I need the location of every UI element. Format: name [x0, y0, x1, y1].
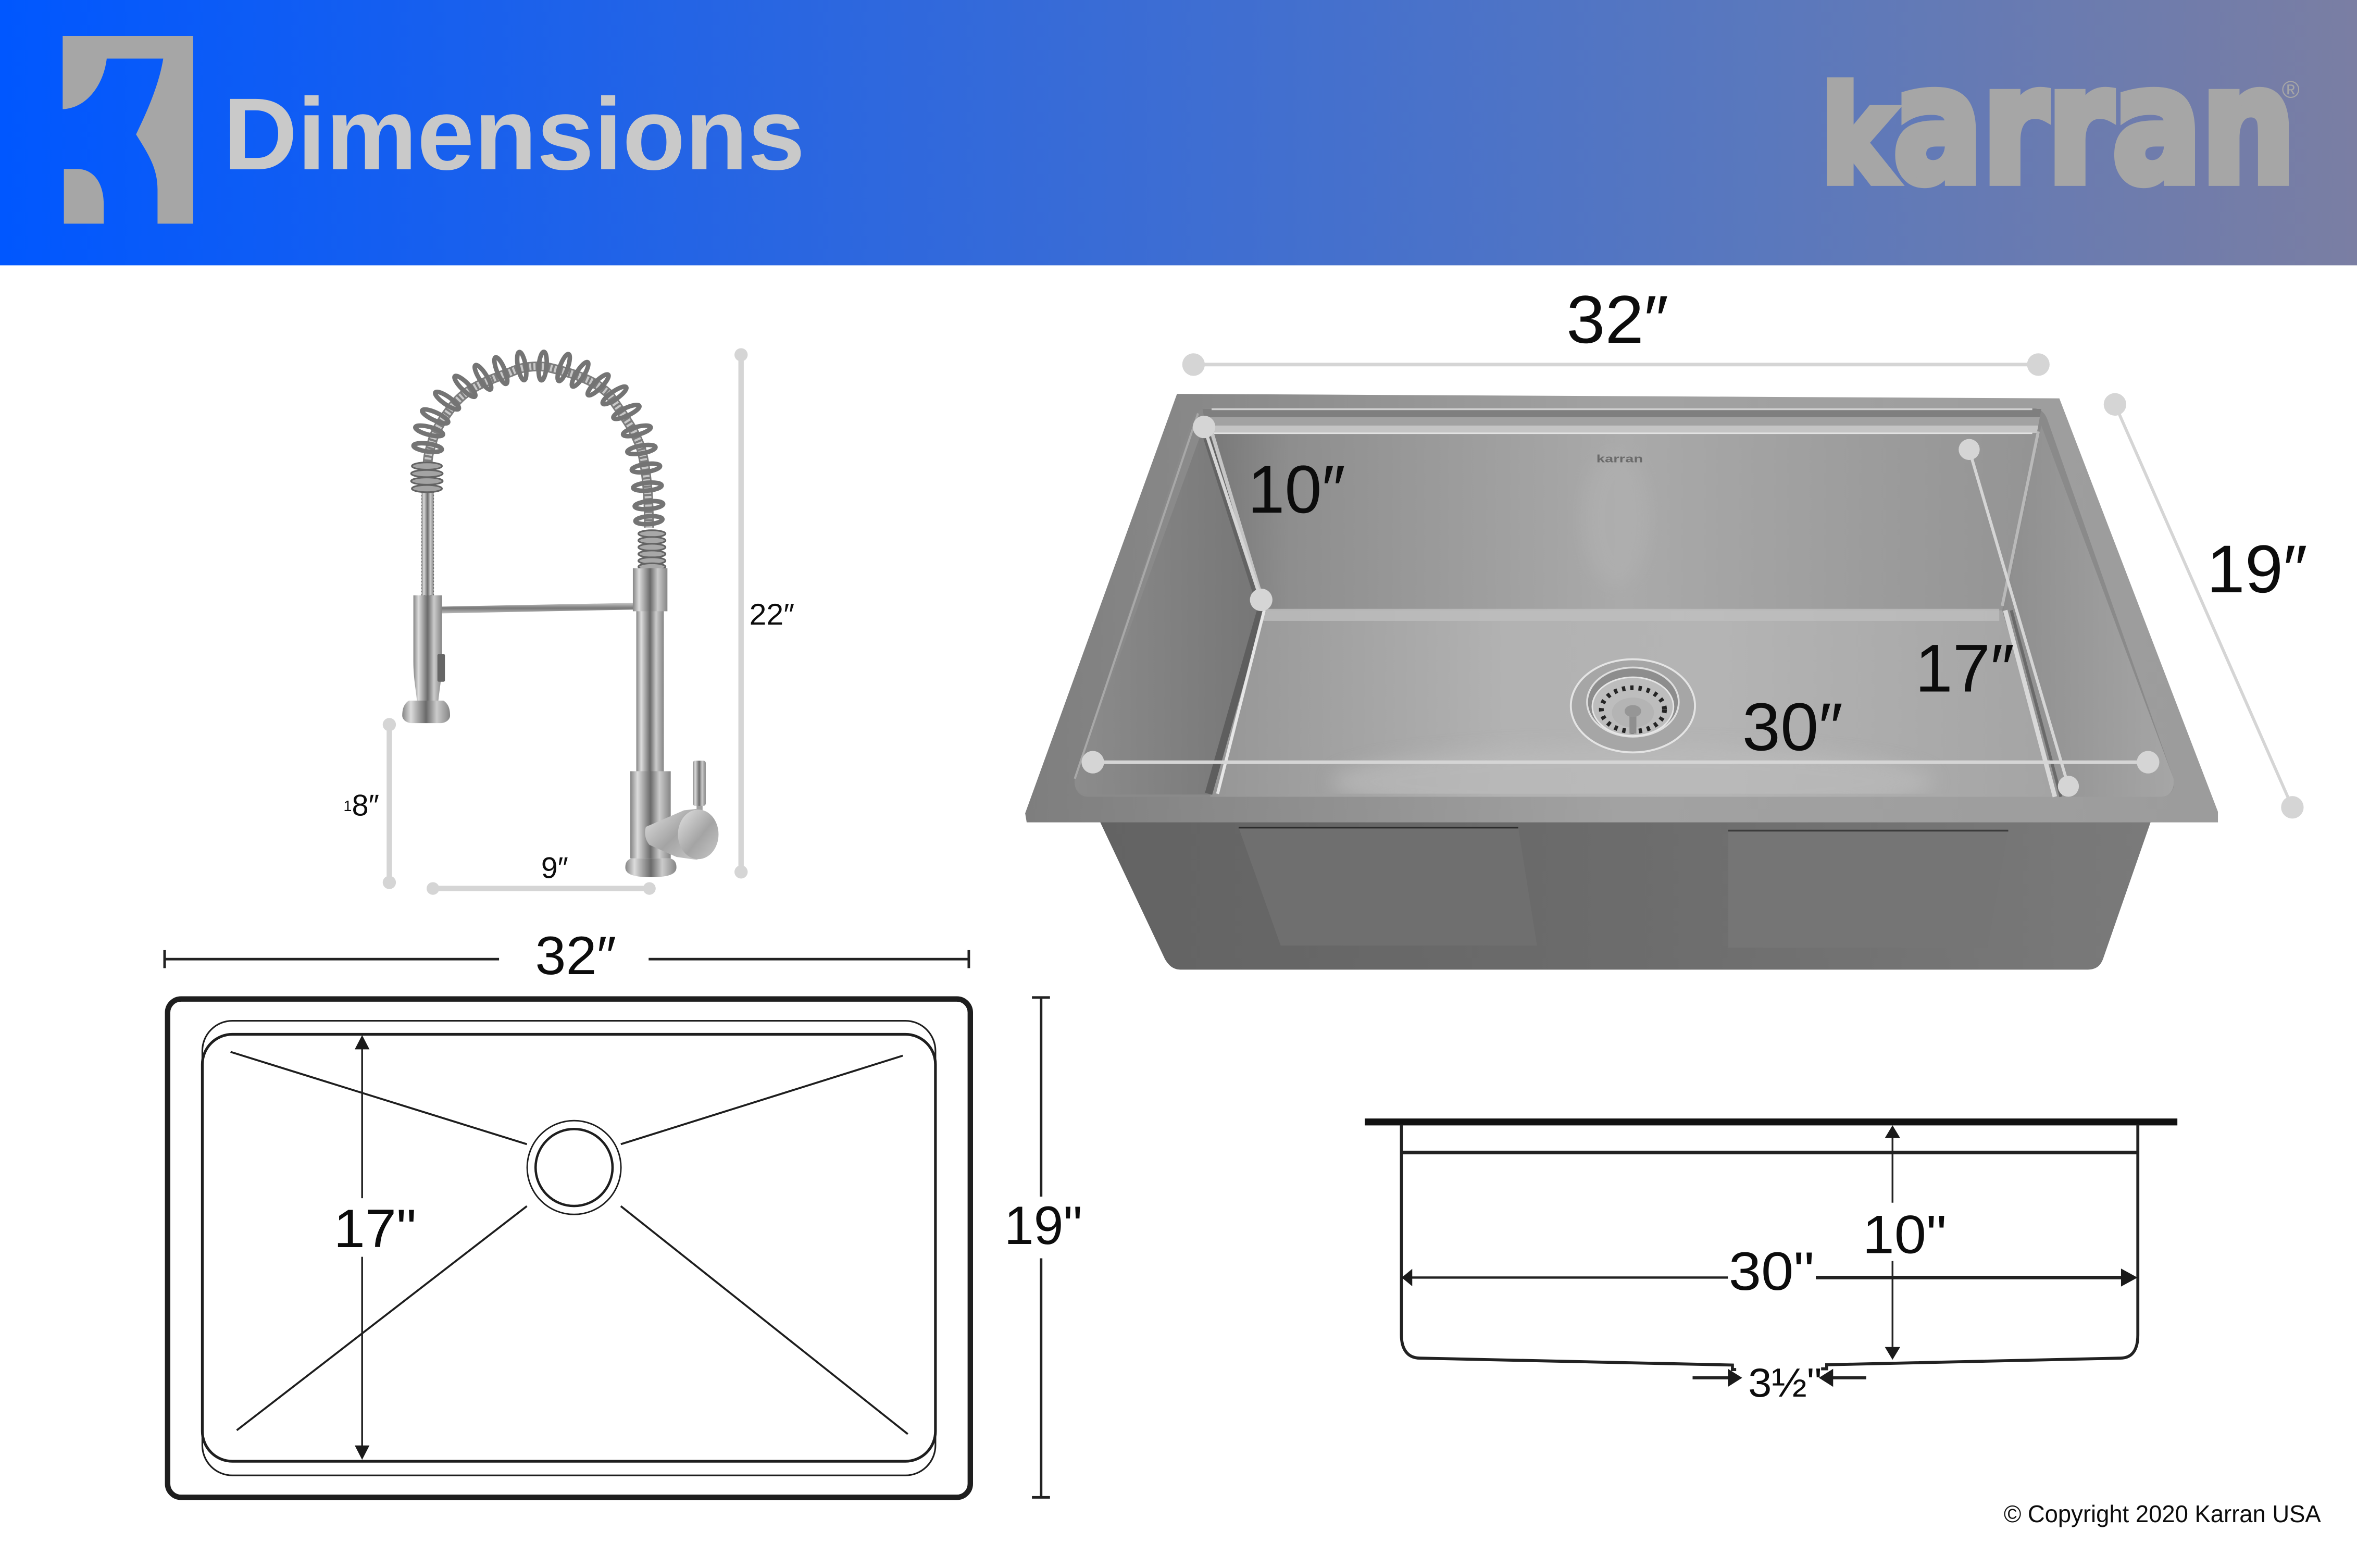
plan: drain circles [527, 1121, 621, 1214]
faucet: main column [626, 568, 677, 877]
plan view drawing [165, 926, 1082, 1497]
dimension: bowl height 10 [1193, 416, 1345, 611]
dimension: spout clearance 18 [343, 718, 396, 889]
dimension: overall depth 19: 19″ [2206, 531, 2308, 607]
sink: bowl interior [1075, 408, 2174, 818]
section view drawing [1365, 1118, 2177, 1405]
dimension: spout reach 9 [427, 851, 656, 895]
sink: drain strainer [1571, 659, 1695, 752]
dimension: section width 30: 30" [1729, 1241, 1814, 1302]
sink: top flange rim [1025, 394, 2218, 823]
dimension: bowl front-to-back 17: 17″ [1915, 630, 2014, 706]
dimension: spout reach 9: 9″ [541, 851, 568, 885]
dimension: section width 30 [1402, 1241, 2138, 1302]
dimension: bowl width 30: 30″ [1742, 689, 1843, 765]
dimension: drain opening 3 1/2: 3½" [1748, 1360, 1822, 1405]
icon: Karran K mark [63, 36, 193, 223]
sink: karran engraving: karran [1597, 453, 1643, 465]
dimension: overall width 32: 32″ [1566, 281, 1668, 357]
dimension: section height 10 [1863, 1125, 1947, 1360]
faucet: left compact spring and flexible hose [411, 463, 443, 595]
plan: outer flange outline [168, 999, 970, 1497]
dimension: plan overall depth 19 [1004, 997, 1082, 1497]
faucet: right compact spring [639, 530, 666, 570]
logo: karran wordmark: karran [1822, 32, 2296, 219]
heading: Dimensions: Dimensions [223, 77, 805, 191]
sink: underbody [1100, 821, 2151, 969]
header banner [0, 0, 2357, 265]
dimension: section height 10: 10" [1863, 1204, 1947, 1265]
dimension: faucet height 22: 22″ [750, 598, 794, 631]
copyright note: © Copyright 2020 Karran USA [2004, 1500, 2321, 1527]
dimension: bowl height 10: 10″ [1248, 451, 1345, 527]
faucet: spring hose arch [413, 351, 664, 528]
dimension: spout clearance 18: 8″ [352, 789, 379, 823]
faucet: handle [645, 761, 718, 860]
faucet photo with dimensions [343, 348, 794, 895]
dimension: faucet height 22 [734, 348, 794, 879]
plan: bowl outline [202, 1035, 936, 1461]
dimension: plan overall depth 19: 19" [1004, 1196, 1082, 1256]
sink photo with dimensions [1025, 281, 2308, 969]
dimension: plan bowl depth 17 [334, 1035, 416, 1460]
logo: registered mark: ® [2282, 76, 2300, 103]
dimension: plan bowl depth 17: 17" [334, 1199, 416, 1259]
plan: rim outline [202, 1021, 936, 1475]
plan: corner drain lines [231, 1052, 908, 1434]
dimension: bowl width 30 [1081, 689, 2160, 774]
section: top flange bar [1365, 1118, 2177, 1125]
faucet: cross bar [441, 603, 634, 613]
dimension: plan width 32 [165, 926, 969, 986]
faucet: spray head [402, 595, 450, 723]
dimension: plan width 32: 32″ [535, 926, 616, 986]
dimension: overall depth 19 [2104, 393, 2308, 818]
dimension: overall width 32 [1182, 281, 2050, 376]
dimension: drain opening 3 1/2 [1692, 1360, 1866, 1405]
section: bowl profile [1401, 1125, 2138, 1370]
dimension: bowl front-to-back 17 [1915, 439, 2079, 797]
dimension: spout clearance 18: 1 [343, 798, 352, 815]
